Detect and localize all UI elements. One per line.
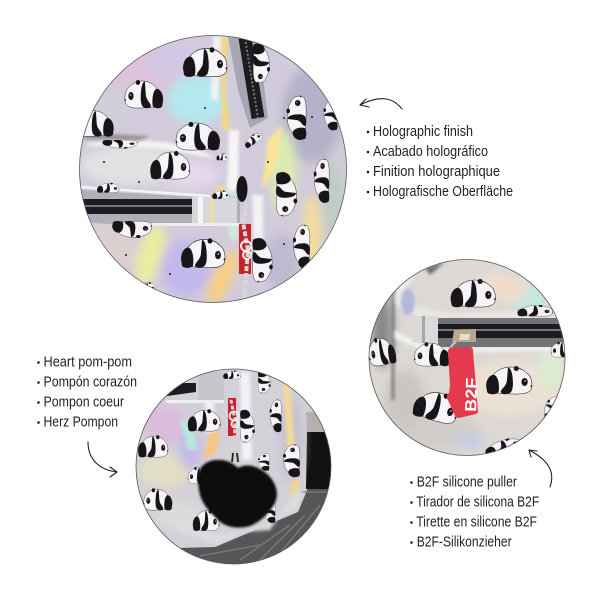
panel: B2F puller photo circle <box>366 259 573 456</box>
text block: heart pom-pom <box>37 354 137 431</box>
text block: holographic finish: Finition holographique <box>373 163 500 180</box>
pandas <box>366 279 573 456</box>
pandas on holographic fabric <box>76 43 338 293</box>
zipper pull and chain <box>236 176 251 300</box>
text block: holographic finish: Holografische Oberfläche <box>373 183 513 200</box>
red silicone puller <box>447 347 481 418</box>
arrow: to puller circle <box>529 450 552 487</box>
text block: heart pom-pom: Herz Pompon <box>44 414 118 431</box>
background denim and wall <box>180 412 331 564</box>
arrow: to pom-pom circle <box>88 442 117 477</box>
panel: holographic finish photo circle <box>75 35 347 309</box>
pandas <box>138 370 300 531</box>
zipper tape and teeth <box>412 316 566 347</box>
black heart pom-pom <box>198 460 277 528</box>
text block: B2F silicone puller <box>410 474 539 550</box>
text block: holographic finish: Acabado holográfico <box>373 143 488 160</box>
text block: holographic finish: Holographic finish <box>373 123 473 140</box>
text block: heart pom-pom: Pompon coeur <box>44 394 124 411</box>
vertical zipper <box>228 36 268 128</box>
text block: heart pom-pom: Pompón corazón <box>44 374 137 391</box>
pocket zipper <box>166 372 224 403</box>
red silicone puller: B2F <box>463 377 481 412</box>
text block: holographic finish <box>367 123 513 200</box>
panel: heart pom-pom photo circle <box>135 369 335 570</box>
zipper slider <box>449 329 476 356</box>
text block: B2F silicone puller: Tirador de silicona B2F <box>416 494 539 510</box>
horizontal zipper pocket <box>80 187 240 226</box>
text block: B2F silicone puller: B2F silicone puller <box>417 474 517 491</box>
text block: heart pom-pom: Heart pom-pom <box>44 354 132 371</box>
arrow: to holographic circle <box>360 99 402 109</box>
text block: B2F silicone puller: Tirette en silicone B2F <box>416 514 537 530</box>
text block: B2F silicone puller: B2F-Silikonzieher <box>417 534 512 550</box>
sparkle dots <box>103 107 313 275</box>
chain and red tag <box>228 398 240 462</box>
